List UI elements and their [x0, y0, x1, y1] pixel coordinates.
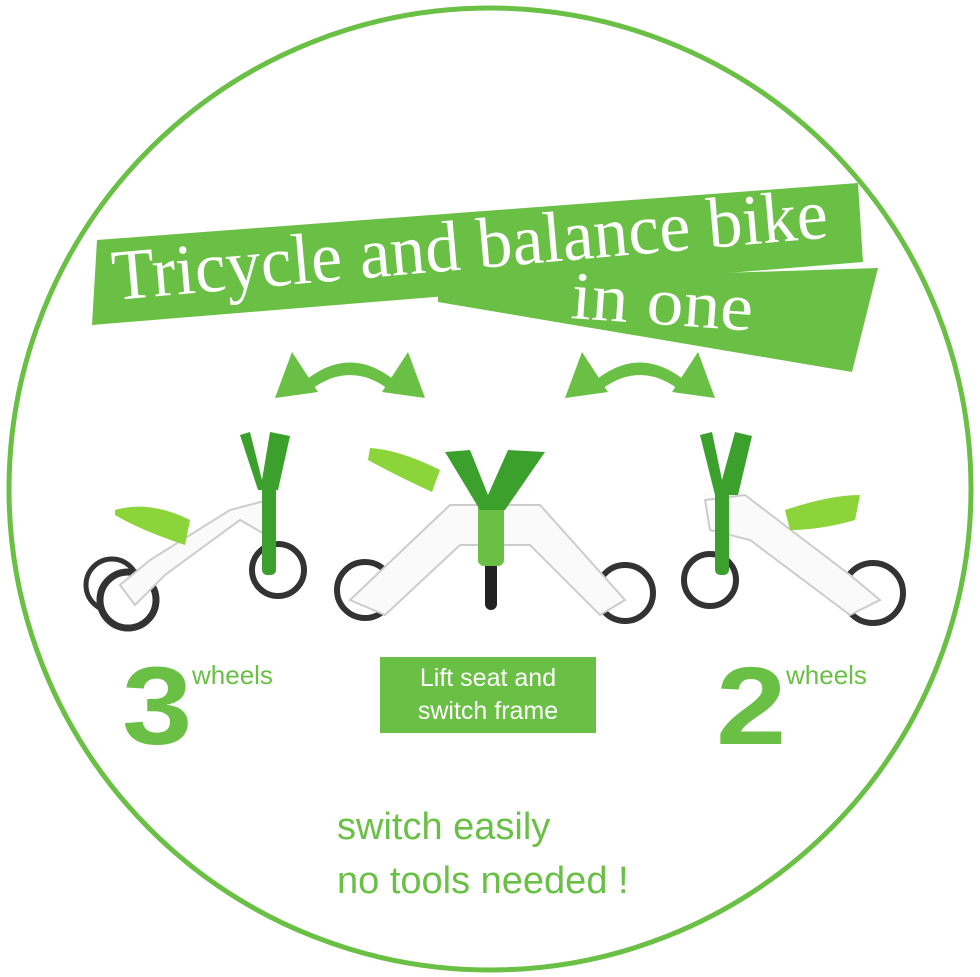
label: 2 wheels: wheels: [786, 660, 867, 690]
banner title line 2: in one: [569, 257, 756, 346]
bike: tricycle: [86, 432, 304, 628]
tagline: switch easily: [337, 806, 550, 848]
bike: balance bike: [684, 432, 903, 623]
tagline: no tools needed !: [337, 860, 629, 902]
banner band 2: [438, 268, 878, 372]
callout: lift seat and switch frame: Lift seat and: [420, 664, 556, 692]
label: 2 wheels: 2: [716, 645, 786, 768]
banner title line 1: Tricycle and balance bike: [108, 174, 831, 316]
callout: lift seat and switch frame: switch frame: [418, 697, 558, 725]
tagline: [337, 806, 629, 902]
arrows: [275, 352, 715, 398]
arrow: left double: [275, 352, 425, 398]
callout: lift seat and switch frame: [380, 657, 596, 733]
label: 3 wheels: [122, 645, 273, 768]
label: 2 wheels: [716, 645, 867, 768]
bike: lifted seat: [337, 448, 653, 621]
label: 3 wheels: wheels: [192, 660, 273, 690]
banner band 1: [92, 183, 863, 325]
arrow: right double: [565, 352, 715, 398]
banner: [92, 174, 878, 372]
bikes: [84, 432, 906, 632]
label: 3 wheels: 3: [122, 645, 192, 768]
